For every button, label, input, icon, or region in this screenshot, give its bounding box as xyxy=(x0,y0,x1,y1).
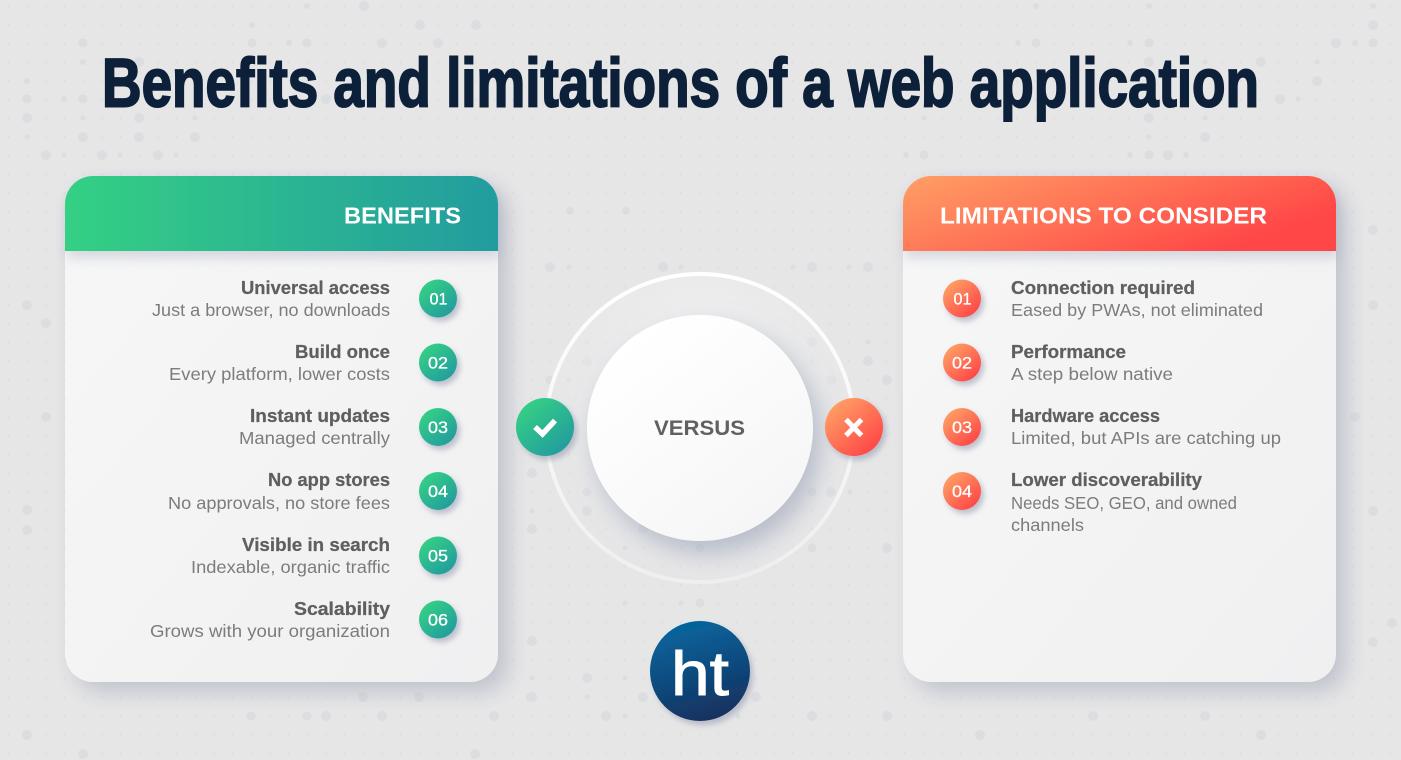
benefit 04: No app stores xyxy=(268,469,390,490)
versus graphic xyxy=(516,274,883,582)
limitation 01: 01 xyxy=(954,290,972,308)
benefit 01: 01 xyxy=(430,290,448,308)
limitation 02: Performance xyxy=(1011,341,1126,362)
benefit 06: Grows with your organization xyxy=(150,621,390,641)
limitation 04: Needs SEO, GEO, and owned xyxy=(1011,493,1237,513)
benefit 05: Visible in search xyxy=(242,534,390,555)
benefit 06 xyxy=(150,598,457,641)
limitation 02: 02 xyxy=(952,354,972,372)
limitation 03: 03 xyxy=(952,419,972,437)
limitation 01: Connection required xyxy=(1011,277,1195,298)
benefit 05: 05 xyxy=(428,548,448,566)
limitation 02: A step below native xyxy=(1011,364,1173,384)
icon: cross mark xyxy=(825,398,883,456)
benefit 02 xyxy=(169,341,457,384)
benefit 02: Every platform, lower costs xyxy=(169,364,390,384)
panel: benefits xyxy=(65,176,498,682)
benefit 03 xyxy=(239,405,457,448)
benefits heading: BENEFITS xyxy=(344,202,461,228)
logo: ht xyxy=(650,621,750,721)
benefit 05 xyxy=(191,534,457,577)
benefit 04 xyxy=(168,469,457,513)
benefit 03: 03 xyxy=(428,419,448,437)
limitation 01: Eased by PWAs, not eliminated xyxy=(1011,300,1263,320)
benefit 05: Indexable, organic traffic xyxy=(191,557,390,577)
limitation 03 xyxy=(943,405,1281,448)
limitation 04: Lower discoverability xyxy=(1011,469,1203,490)
icon: check mark xyxy=(516,398,574,456)
benefit 01: Just a browser, no downloads xyxy=(152,300,390,320)
benefit 03: Instant updates xyxy=(250,405,390,426)
limitation 02 xyxy=(943,341,1173,384)
limitation 03: Hardware access xyxy=(1011,405,1160,426)
limitation 04: 04 xyxy=(952,483,972,501)
benefit 06: 06 xyxy=(428,612,448,630)
benefit 02: 02 xyxy=(428,354,448,372)
benefit 01: Universal access xyxy=(241,277,390,298)
benefits header band xyxy=(65,176,498,251)
limitations heading: LIMITATIONS TO CONSIDER xyxy=(940,202,1267,228)
limitation 04 xyxy=(943,469,1237,535)
limitation 04: channels xyxy=(1011,515,1084,535)
panel: limitations xyxy=(903,176,1336,682)
limitation 03: Limited, but APIs are catching up xyxy=(1011,428,1281,448)
limitation 01 xyxy=(943,277,1263,320)
benefit 03: Managed centrally xyxy=(239,428,390,448)
benefit 01 xyxy=(152,277,457,320)
versus disc xyxy=(587,315,813,541)
logo: ht: ht xyxy=(671,640,729,709)
benefit 02: Build once xyxy=(295,341,390,362)
limitations header band xyxy=(903,176,1336,251)
benefit 04: No approvals, no store fees xyxy=(168,493,390,513)
benefit 04: 04 xyxy=(428,483,448,501)
versus label: VERSUS xyxy=(654,417,745,440)
benefit 06: Scalability xyxy=(294,598,391,619)
